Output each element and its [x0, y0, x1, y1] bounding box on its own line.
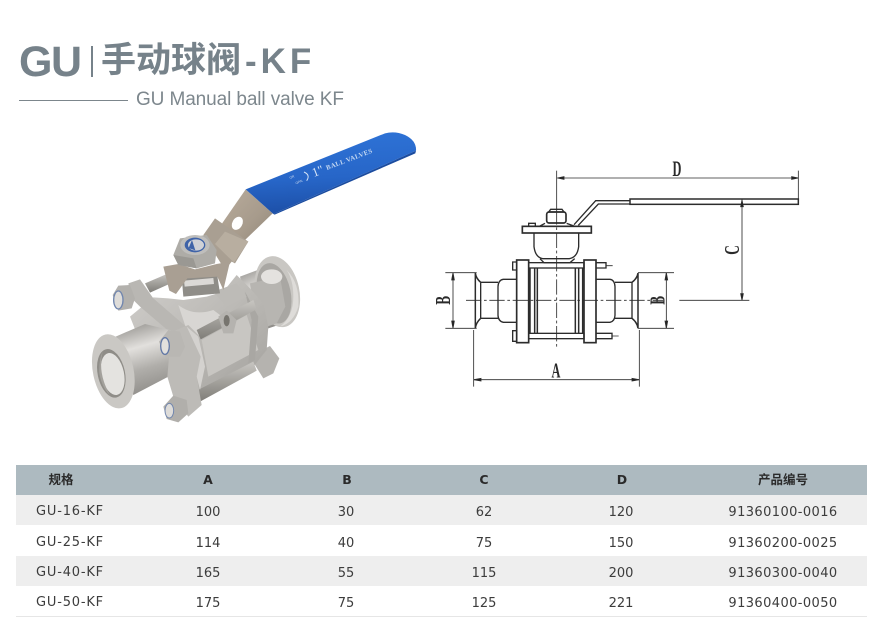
- row: GU-25-KF: GU-25-KF: [36, 535, 104, 550]
- dimension A: [474, 330, 639, 387]
- lower tie rod: [197, 362, 257, 402]
- valve body: [130, 275, 268, 393]
- row: GU-16-KF: 100: [196, 505, 220, 520]
- title: Chinese heading: 手动球阀: [101, 41, 241, 80]
- row: GU-50-KF: 125: [472, 596, 496, 611]
- row: GU-25-KF: 150: [609, 536, 633, 551]
- row: GU-25-KF: 114: [196, 536, 220, 551]
- title: vertical divider: [91, 46, 93, 77]
- row: GU-50-KF: 175: [196, 596, 220, 611]
- table row shading 1: [16, 495, 867, 525]
- stem, nut and stop plate: [163, 235, 230, 297]
- row: GU-50-KF: [36, 595, 838, 611]
- dimension D: [557, 156, 798, 199]
- handle: blue grip with marking: OPN: [295, 179, 304, 185]
- front flange plate: [167, 325, 202, 417]
- drawing: stem nut and mounting pad: [522, 209, 591, 263]
- back bolt: [113, 285, 135, 311]
- left KF flange: [86, 330, 141, 412]
- dimension B right: B: [645, 296, 669, 305]
- drawing: handle lever: [574, 199, 798, 225]
- handle: steel lever plate and collar: [203, 189, 273, 270]
- header: 产品编号: 产品编号: [758, 472, 808, 487]
- front bolt: [159, 330, 185, 357]
- product photo: KF ball valve: [92, 132, 416, 422]
- specification table: [16, 465, 867, 617]
- row: GU-50-KF: 221: [609, 596, 633, 611]
- row: GU-16-KF: [36, 504, 838, 520]
- header: 规格: 规格: [48, 472, 74, 487]
- drawing: valve body with bolts: [513, 260, 619, 343]
- table row shading 3: [16, 556, 867, 586]
- body front facet: [202, 315, 258, 377]
- row: GU-40-KF: 115: [472, 566, 496, 581]
- handle: blue grip with marking: 1": [310, 163, 326, 180]
- dimension A: A: [552, 358, 561, 383]
- drawing: left KF end: [475, 273, 517, 328]
- row: GU-16-KF: 120: [609, 505, 633, 520]
- row: GU-40-KF: 200: [609, 566, 633, 581]
- upper right tie rod: [197, 300, 257, 339]
- handle: blue grip with marking: BALL VALVES: [325, 148, 374, 172]
- row: GU-25-KF: 91360200-0025: [728, 536, 838, 551]
- row: GU-50-KF: GU-50-KF: [36, 595, 104, 610]
- row: GU-40-KF: GU-40-KF: [36, 565, 104, 580]
- title: [19, 38, 344, 110]
- dimension B right: [638, 273, 674, 328]
- dimension C: C: [720, 245, 744, 255]
- row: GU-16-KF: 91360100-0016: [728, 505, 838, 520]
- row: GU-40-KF: 91360300-0040: [728, 566, 838, 581]
- body neck: [178, 305, 227, 340]
- right KF flange: [240, 252, 306, 333]
- header: A: A: [203, 472, 213, 487]
- drawing: centre lines: [466, 171, 663, 347]
- header: C: C: [479, 472, 489, 487]
- dimension D: D: [673, 156, 681, 181]
- back tie rod: [145, 273, 171, 293]
- row: GU-25-KF: [36, 535, 838, 551]
- row: GU-40-KF: 165: [196, 566, 220, 581]
- row: GU-50-KF: 75: [338, 596, 354, 611]
- handle: blue grip with marking: OR: [289, 174, 296, 180]
- bottom bolt: [163, 396, 188, 422]
- title: KF suffix: -KF: [245, 42, 315, 81]
- body rear rib: [245, 292, 258, 363]
- dimension B left: [431, 273, 477, 328]
- row: GU-40-KF: 55: [338, 566, 354, 581]
- table bottom rule: [16, 616, 867, 617]
- left KF pipe: [112, 324, 187, 395]
- row: GU-16-KF: 62: [476, 505, 492, 520]
- header: D: D: [617, 472, 627, 487]
- handle: blue grip with marking: [246, 132, 416, 215]
- subtitle rule: [19, 100, 128, 101]
- row: GU-25-KF: 75: [476, 536, 492, 551]
- row: GU-40-KF: [36, 565, 838, 581]
- row: GU-25-KF: 40: [338, 536, 354, 551]
- row: GU-50-KF: 91360400-0050: [728, 596, 838, 611]
- row: GU-16-KF: 30: [338, 505, 354, 520]
- rear lower plate: [255, 346, 279, 378]
- header: B: B: [342, 472, 352, 487]
- title: GU mark: GU: [19, 38, 80, 86]
- technical drawing with dimensions: [431, 156, 800, 387]
- subtitle: GU Manual ball valve KF: [136, 89, 344, 110]
- rear flange plate: [128, 279, 190, 335]
- dimension C: [679, 199, 749, 301]
- dimension B left: B: [431, 296, 455, 305]
- row: GU-16-KF: GU-16-KF: [36, 504, 104, 519]
- drawing: right KF end: [596, 273, 638, 328]
- table header band: [16, 465, 867, 495]
- valve lower assembly: [86, 273, 279, 422]
